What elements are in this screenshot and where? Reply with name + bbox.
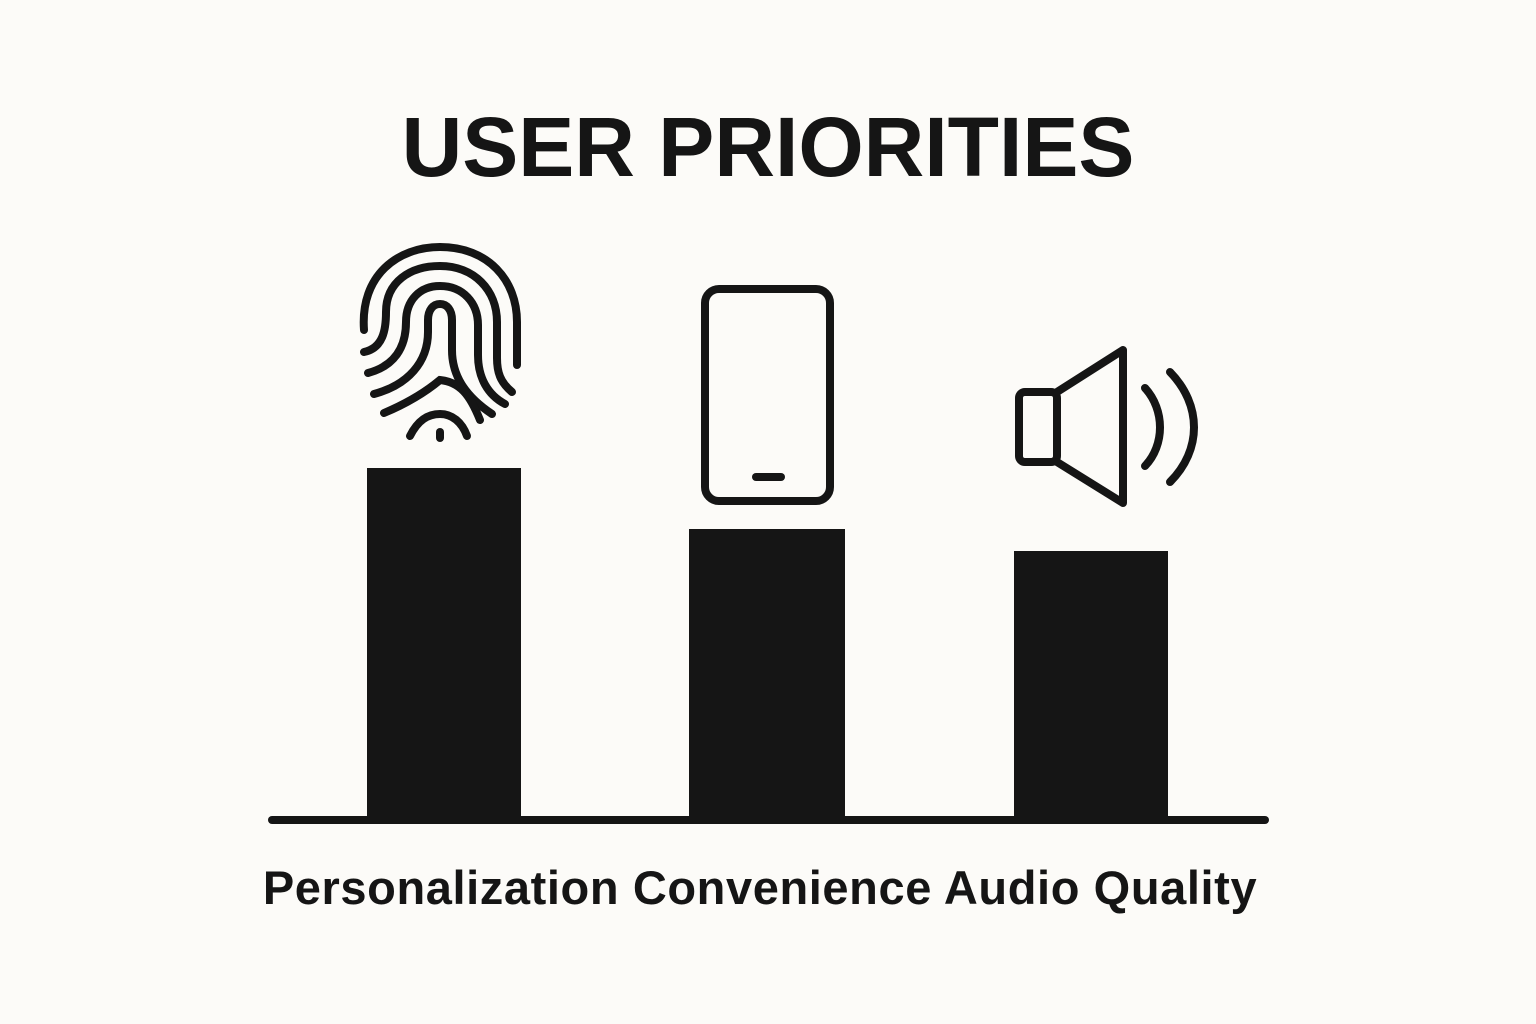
icon: phone [705,289,830,501]
title: USER PRIORITIES [402,100,1134,194]
icon: speaker [1019,350,1194,503]
axis baseline [272,816,1265,824]
category labels: Personalization Convenience Audio Quality [263,861,1257,914]
icon: fingerprint [364,247,517,438]
bar chart [367,468,1168,818]
bar: convenience [689,529,845,818]
bar: personalization [367,468,521,818]
bar: audio quality [1014,551,1168,818]
